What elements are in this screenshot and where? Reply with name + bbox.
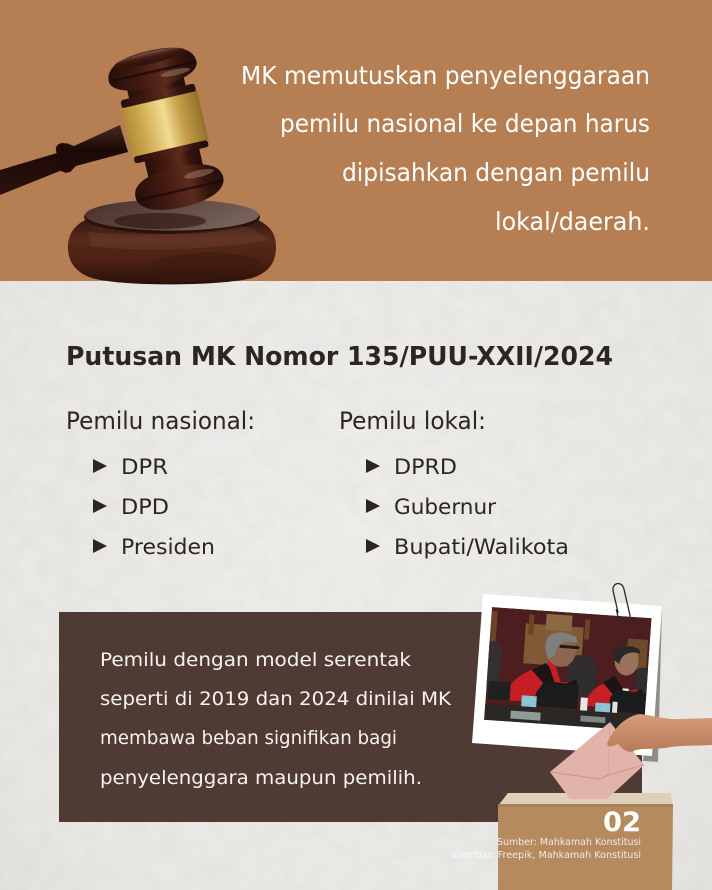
handle [0, 125, 128, 195]
headline text: dipisahkan dengan pemilu [342, 158, 650, 187]
icon: envelope [550, 722, 644, 799]
list: pemilu nasional [66, 407, 255, 560]
page number: 02 [603, 807, 641, 838]
bottom cap [127, 138, 228, 217]
polaroid photo of judges [472, 594, 662, 762]
item: Gubernur: Gubernur [394, 495, 496, 520]
item: DPRD: DPRD [394, 455, 457, 480]
ballot box [498, 793, 673, 890]
desk [484, 704, 637, 729]
item: DPD [93, 495, 169, 520]
desk monitors and bottles [488, 681, 646, 714]
icon: judge gavel and sound block [0, 41, 276, 284]
section heading: Putusan MK Nomor 135/PUU-XXII/2024 [66, 342, 613, 372]
item: Presiden: Presiden [121, 535, 215, 560]
icon: hand holding envelope [607, 714, 712, 752]
explanation text [100, 649, 452, 789]
item: DPR: DPR [121, 455, 168, 480]
headline text [241, 61, 650, 236]
hammer head [104, 41, 228, 217]
explanation text: seperti di 2019 dan 2024 dinilai MK [100, 688, 452, 710]
item: DPR [93, 455, 168, 480]
header band [0, 0, 712, 281]
item: DPRD [366, 455, 457, 480]
headline text: pemilu nasional ke depan harus [280, 109, 650, 138]
source credits: Gambar: Freepik, Mahkamah Konstitusi [453, 850, 641, 861]
photo: constitutional court judges [480, 607, 655, 733]
list: pemilu lokal [339, 407, 569, 560]
source credits [453, 837, 641, 861]
sound block [68, 200, 276, 284]
headline text: lokal/daerah. [495, 207, 650, 236]
left judge [503, 629, 580, 705]
explanation text: Pemilu dengan model serentak [100, 649, 411, 671]
gold band [121, 91, 208, 157]
item: DPD: DPD [121, 495, 169, 520]
right judge [587, 646, 642, 706]
headline text: MK memutuskan penyelenggaraan [241, 61, 650, 90]
explanation text: membawa beban signifikan bagi [100, 727, 397, 749]
explanation text: penyelenggara maupun pemilih. [100, 767, 422, 789]
top cap [104, 41, 203, 111]
list heading: lokal: Pemilu lokal: [339, 407, 486, 435]
item: Bupati/Walikota: Bupati/Walikota [394, 535, 569, 560]
source credits: Sumber: Mahkamah Konstitusi [497, 837, 641, 848]
panel: explanation [59, 612, 642, 822]
list heading: nasional: Pemilu nasional: [66, 407, 255, 435]
icon: paper clip [611, 582, 631, 624]
